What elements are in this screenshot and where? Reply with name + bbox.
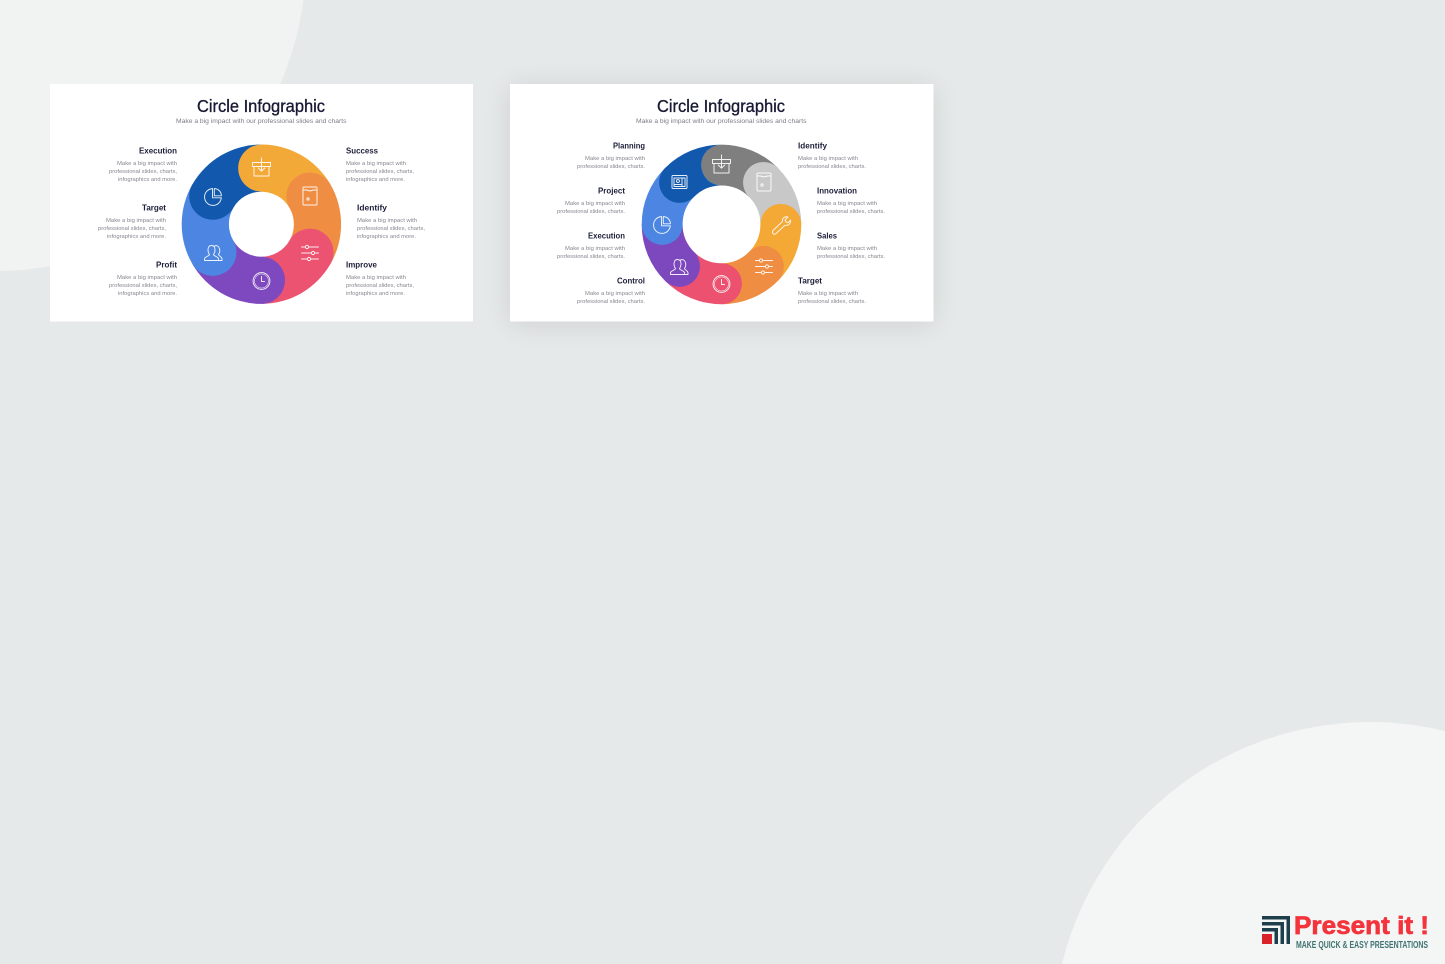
text: profit: professional slides, charts,	[109, 283, 177, 289]
icon: wrench	[772, 217, 791, 234]
segment: sales	[749, 204, 801, 281]
text: target: professional slides, charts,	[98, 226, 166, 232]
text: target: professional slides, charts.	[798, 299, 866, 305]
title: Circle Infographic	[197, 96, 325, 116]
text: identify: Identify	[357, 202, 387, 212]
donut chart: six segments	[158, 125, 365, 324]
text: innovation: professional slides, charts.	[817, 209, 885, 215]
icon: sliders	[302, 245, 318, 261]
text: improve: Make a big impact with	[346, 275, 406, 281]
text: execution	[109, 146, 177, 183]
text: identify	[357, 202, 425, 240]
icon: image	[672, 176, 687, 188]
text: innovation: Make a big impact with	[817, 201, 877, 207]
segment: target	[701, 229, 792, 321]
text: execution: professional slides, charts.	[557, 254, 625, 260]
text: success: professional slides, charts,	[346, 169, 414, 175]
text: success	[346, 146, 414, 183]
icon: users	[670, 260, 688, 274]
text: execution: Make a big impact with	[117, 161, 177, 167]
text: control: professional slides, charts.	[577, 299, 645, 305]
text: identify: Make a big impact with	[357, 218, 417, 224]
text: execution: Make a big impact with	[565, 246, 625, 252]
text: sales	[817, 230, 885, 260]
text: planning: professional slides, charts.	[577, 164, 645, 170]
icon: tablet	[303, 187, 317, 205]
text: profit: Profit	[156, 260, 177, 270]
segment: improve	[241, 212, 342, 324]
icon: clock	[253, 273, 270, 289]
subtitle: Make a big impact with our professional slides and charts	[636, 118, 807, 125]
text: execution	[557, 230, 625, 260]
text: identify: infographics and more.	[357, 234, 416, 240]
text: target: Target	[142, 202, 166, 212]
text: profit: Make a big impact with	[117, 275, 177, 281]
text: profit: infographics and more.	[118, 291, 177, 297]
text: identify: professional slides, charts,	[357, 226, 425, 232]
icon: sliders	[756, 259, 772, 274]
text: planning: Planning	[613, 140, 645, 150]
text: innovation: Innovation	[817, 186, 857, 196]
text: success: Make a big impact with	[346, 161, 406, 167]
segment: execution	[181, 125, 282, 237]
text: execution: Execution	[588, 230, 625, 240]
icon: clock	[713, 276, 730, 292]
icon: tablet	[757, 173, 771, 191]
text: improve	[346, 260, 414, 297]
text: improve: Improve	[346, 260, 377, 270]
segment: execution	[642, 168, 694, 245]
segment: innovation	[726, 154, 818, 245]
text: planning	[577, 140, 645, 170]
text: improve: professional slides, charts,	[346, 283, 414, 289]
icon: box	[712, 155, 730, 173]
icon: pie chart	[205, 189, 221, 205]
segment: identify	[264, 164, 365, 276]
logo wordmark: Present it !	[1294, 912, 1429, 940]
text: sales: Make a big impact with	[817, 246, 877, 252]
segment: control	[625, 204, 717, 295]
segment: profit	[158, 173, 259, 284]
text: sales: professional slides, charts.	[817, 254, 885, 260]
text: target: Make a big impact with	[798, 291, 858, 297]
subtitle: Make a big impact with our professional slides and charts	[176, 118, 347, 125]
text: execution: Execution	[139, 146, 177, 156]
slide: eight-step circle infographic	[510, 84, 934, 324]
text: target: Target	[798, 276, 822, 286]
text: identify: Identify	[798, 140, 827, 150]
icon: pie chart	[654, 217, 670, 233]
text: control: Make a big impact with	[585, 291, 645, 297]
text: identify: professional slides, charts.	[798, 164, 866, 170]
decorative circle: bottom right	[1062, 722, 1445, 964]
text: control: Control	[617, 276, 645, 286]
donut chart: eight segments	[625, 128, 818, 321]
text: project: Make a big impact with	[565, 201, 625, 207]
logo mark	[1262, 916, 1290, 944]
title: Circle Infographic	[657, 96, 785, 116]
text: sales: Sales	[817, 230, 837, 240]
text: success: infographics and more.	[346, 177, 405, 183]
slide: six-step circle infographic	[50, 84, 473, 324]
logo: Present it	[1262, 912, 1429, 951]
icon: users	[204, 246, 222, 260]
text: improve: infographics and more.	[346, 291, 405, 297]
text: profit	[109, 260, 177, 297]
text: target	[98, 202, 166, 240]
text: target	[798, 276, 866, 305]
text: identify: Make a big impact with	[798, 156, 858, 162]
segment: time	[665, 252, 742, 304]
segment: identify	[701, 145, 778, 197]
text: success: Success	[346, 146, 378, 156]
segment: time	[192, 240, 285, 304]
text: execution: infographics and more.	[118, 177, 177, 183]
segment: success	[238, 144, 330, 208]
text: innovation	[817, 186, 885, 215]
text: planning: Make a big impact with	[585, 156, 645, 162]
text: project	[557, 186, 625, 215]
segment: project	[651, 128, 742, 219]
icon: box	[252, 158, 270, 176]
text: identify	[798, 140, 866, 170]
text: control	[577, 276, 645, 305]
text: target: infographics and more.	[107, 234, 166, 240]
text: project: professional slides, charts.	[557, 209, 625, 215]
decorative circle: top left	[0, 0, 303, 271]
text: target: Make a big impact with	[106, 218, 166, 224]
text: execution: professional slides, charts,	[109, 169, 177, 175]
text: project: Project	[598, 186, 625, 196]
